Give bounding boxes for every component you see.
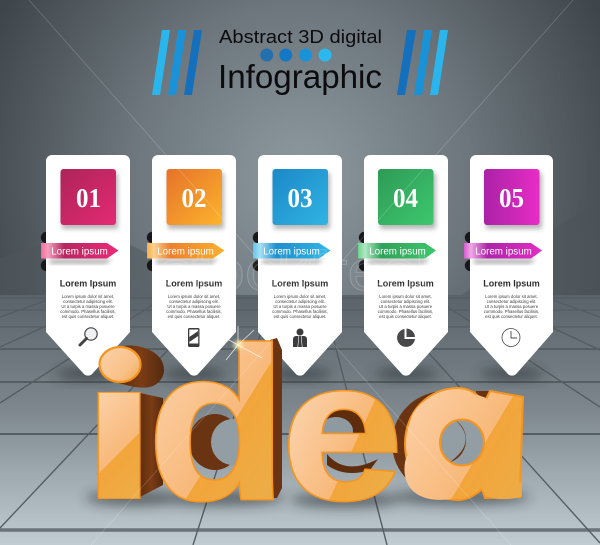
panel: card 03: 03 xyxy=(288,183,312,213)
letter a counter xyxy=(440,420,484,466)
panel: card 02 xyxy=(147,155,236,376)
letter d: d xyxy=(147,304,287,545)
icon: magnifier xyxy=(80,328,97,345)
icon: clock xyxy=(502,328,520,346)
panel: card 04: commodo. Phasellus facilisis, xyxy=(378,309,433,314)
panel: card 05: Lorem ipsum dolor sit amet, xyxy=(485,294,538,299)
title dots xyxy=(260,48,332,62)
watermark: stockfresh xyxy=(160,239,450,302)
panel: card 04: Lorem ipsum xyxy=(369,246,426,257)
panel: card 02: 02 xyxy=(182,183,206,213)
panel: card 05 xyxy=(464,155,553,376)
letter a: a xyxy=(398,323,522,540)
panel: card 05: Ut a turpis a massa posuere xyxy=(485,304,539,309)
panel: card 01: Ut a turpis a massa posuere xyxy=(61,304,115,309)
title: top heading: Infographic xyxy=(218,58,382,95)
panel: card 01 xyxy=(41,155,130,376)
panel: card 02: Lorem Ipsum xyxy=(166,278,222,288)
panel: card 01: est quis consectetur aliquet. xyxy=(62,314,114,319)
panel: card 05: Lorem Ipsum xyxy=(483,278,540,288)
panel: card 04: consectetur adipiscing elit. xyxy=(381,299,430,304)
icon: smartphone xyxy=(188,328,200,347)
letter i: i xyxy=(78,318,160,541)
panel: card 04 xyxy=(358,155,448,376)
panel: card 01: consectetur adipiscing elit. xyxy=(63,299,113,304)
letter a extrusion xyxy=(392,391,498,495)
panel: card 04: Ut a turpis a massa posuere xyxy=(379,304,433,309)
panel: card 01: Lorem ipsum xyxy=(51,246,108,257)
panel: card 05: consectetur adipiscing elit. xyxy=(487,299,536,304)
panel: card 01: Lorem ipsum dolor sit amet, xyxy=(62,294,114,299)
panel: card 02: consectetur adipiscing elit. xyxy=(169,299,219,304)
letter i extrusion xyxy=(118,346,164,497)
panel: card 02: Ut a turpis a massa posuere xyxy=(167,304,221,309)
panel: card 03: commodo. Phasellus facilisis, xyxy=(272,309,328,314)
panel: card 05: est quis consectetur aliquet. xyxy=(485,314,538,319)
letter a bowl backing xyxy=(405,388,523,500)
panel: card 03: Lorem ipsum xyxy=(263,246,320,257)
right title stripes xyxy=(397,30,448,95)
panel: card 05: 05 xyxy=(499,183,524,213)
panel: card 02: Lorem ipsum dolor sit amet, xyxy=(168,294,220,299)
panel: card 03: consectetur adipiscing elit. xyxy=(275,299,325,304)
panel: card 02: Lorem ipsum xyxy=(157,246,214,257)
panel: card 03 xyxy=(253,155,342,376)
panel: card 03: Lorem ipsum dolor sit amet, xyxy=(274,294,326,299)
panel: card 01: Lorem Ipsum xyxy=(60,278,116,288)
panel: card 04: Lorem Ipsum xyxy=(377,278,434,288)
panel: card 02: est quis consectetur aliquet. xyxy=(168,314,220,319)
panel: card 02: commodo. Phasellus facilisis, xyxy=(166,309,222,314)
card shadows on floor xyxy=(56,369,544,379)
background wall xyxy=(0,0,600,300)
panel: card 05: Lorem ipsum xyxy=(475,246,532,257)
sparkle on letter d xyxy=(222,326,262,360)
letter e: e xyxy=(281,318,403,542)
panel: card 01: 01 xyxy=(76,183,101,213)
icon: businessman xyxy=(293,328,307,347)
panel: card 04: Lorem ipsum dolor sit amet, xyxy=(379,294,432,299)
title: top heading xyxy=(218,27,382,95)
panel: card 05: commodo. Phasellus facilisis, xyxy=(484,309,539,314)
panel: card 04: 04 xyxy=(393,183,418,213)
icon: pie chart xyxy=(397,328,415,347)
3D word: idea xyxy=(98,338,524,503)
panel: card 03: Ut a turpis a massa posuere xyxy=(273,304,327,309)
letter e extrusion xyxy=(319,408,378,473)
letter shadows on floor xyxy=(85,490,530,507)
tiled floor xyxy=(0,295,600,545)
panel: card 03: Lorem Ipsum xyxy=(272,278,328,288)
panel: card 01: commodo. Phasellus facilisis, xyxy=(60,309,116,314)
letter i dot xyxy=(100,347,140,382)
letter d extrusion xyxy=(189,338,282,498)
panel: card 04: est quis consectetur aliquet. xyxy=(379,314,432,319)
left title stripes xyxy=(152,30,202,95)
title: top heading: Abstract 3D digital xyxy=(219,27,382,47)
panel: card 03: est quis consectetur aliquet. xyxy=(274,314,326,319)
